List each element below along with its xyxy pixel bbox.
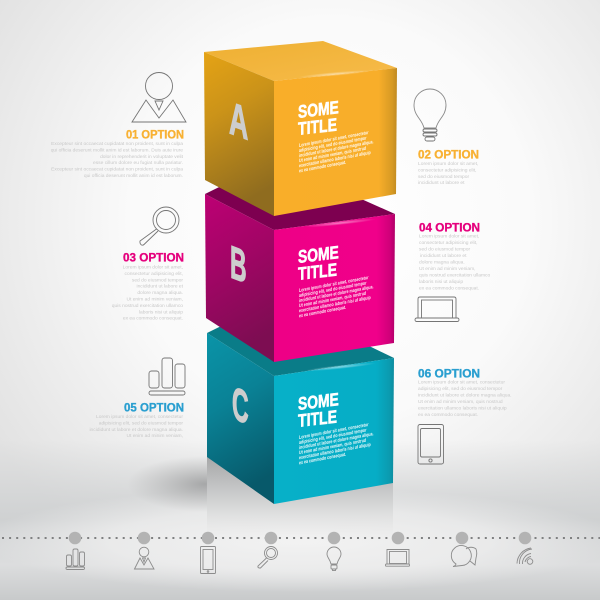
icon: magnifier — [140, 207, 179, 245]
body text B: exercitation ullamco laboris nisi ut aliquip — [299, 294, 371, 314]
body text A: ex ea commodo consequat. — [299, 159, 346, 174]
option 03: sed do eiusmod tempor — [132, 277, 183, 283]
title A — [298, 98, 339, 139]
option 01: Excepteur sint occaecat cupidatat non proident, sunt in culpa — [51, 141, 183, 147]
timeline icon: tablet — [200, 546, 216, 574]
option 06: Lorem ipsum dolor sit amet, consectetur — [418, 380, 505, 386]
icon: laptop — [415, 297, 459, 322]
title A: TITLE — [298, 115, 337, 139]
option 03: incididunt ut labore et — [136, 284, 184, 290]
body text B: ex ea commodo consequat. — [299, 304, 346, 319]
title C: SOME — [298, 390, 339, 414]
option 01: Excepteur sint occaecat cupidatat non proident, sunt in culpa — [51, 167, 183, 173]
option 03: Lorem ipsum dolor sit amet, — [123, 264, 183, 270]
body text C: incididunt ut labore et dolore magna aliqua. — [299, 431, 373, 450]
option 06: ex ea commodo consequat. — [418, 412, 478, 418]
option 03: laboris nisi ut aliquip — [139, 309, 183, 315]
option 03: Ut enim ad minim veniam, — [126, 296, 183, 302]
option 02: 02 OPTION — [418, 148, 479, 162]
letter A: A — [229, 92, 248, 151]
icon: person — [132, 72, 186, 122]
body text B: adipisicing elit, sed do eiusmod tempor — [299, 280, 367, 298]
option 01: 01 OPTION — [126, 128, 184, 142]
body text B: Lorem ipsum dolor sit amet, consectetur — [299, 274, 369, 293]
icon: light bulb — [414, 89, 446, 141]
timeline icon: bar chart — [66, 549, 84, 570]
body text A: Ut enim ad minim veniam, quis nostrud — [299, 145, 366, 163]
option 02: incididunt ut labore et — [418, 180, 465, 186]
cube B — [205, 160, 395, 362]
option 03 — [112, 250, 184, 322]
title B: TITLE — [298, 260, 337, 284]
timeline icon: magnifier — [258, 546, 278, 568]
body text A: adipisicing elit, sed do eiusmod tempor — [299, 135, 367, 153]
body text A: exercitation ullamco laboris nisi ut aliquip — [299, 149, 371, 169]
timeline icon: laptop — [386, 550, 410, 566]
option 05: Ut enim ad minim veniam, — [126, 433, 183, 439]
body text C: ex ea commodo consequat. — [299, 451, 346, 466]
title B: SOME — [298, 243, 339, 267]
option 03: 03 OPTION — [123, 250, 184, 264]
option 04: quis nostrud exercitation ullamco — [419, 272, 491, 278]
cube shadow — [127, 456, 393, 545]
option 04: Ut enim ad minim veniam, — [419, 266, 476, 272]
option 02: sed do eiusmod tempor — [418, 174, 469, 180]
letter B: B — [230, 236, 247, 293]
option 03: ex ea commodo consequat. — [123, 316, 183, 322]
body text B: Ut enim ad minim veniam, quis nostrud — [299, 290, 366, 308]
option 04: consectetur adipisicing elit, — [419, 240, 477, 246]
title A: SOME — [298, 98, 339, 122]
option 06: incididunt ut labore et dolore magna aliqua. — [418, 392, 512, 398]
option 01: esse cillum dolore eu fugiat nulla pariatur. — [93, 160, 183, 166]
option 04: dolore magna aliqua. — [419, 260, 465, 266]
option 05 — [89, 400, 184, 439]
body text B: incididunt ut labore et dolore magna aliqua. — [299, 284, 373, 303]
option 04: incididunt ut labore et — [420, 253, 467, 259]
body text A: Lorem ipsum dolor sit amet, consectetur — [299, 129, 369, 148]
option 04: sed do eiusmod tempor — [419, 246, 470, 252]
body text C: adipisicing elit, sed do eiusmod tempor — [299, 427, 367, 445]
option 03: consectetur adipisicing elit, — [125, 271, 183, 277]
option 02: Lorem ipsum dolor sit amet, — [418, 161, 478, 167]
option 03: quis nostrud exercitation ullamco — [112, 303, 183, 309]
title C — [298, 390, 339, 431]
option 06: exercitation ullamco laboris nisi ut aliquip — [418, 406, 507, 412]
body text C: exercitation ullamco laboris nisi ut aliquip — [299, 441, 371, 461]
cube A — [204, 41, 397, 216]
option 06: Ut enim ad minim veniam, quis nostrud — [418, 399, 503, 405]
cube C — [207, 300, 394, 504]
option 06 — [418, 366, 512, 418]
option 02: consectetur adipisicing elit, — [418, 167, 476, 173]
title B — [298, 243, 339, 284]
body text A: incididunt ut labore et dolore magna aliqua. — [299, 139, 373, 158]
option 04: laboris nisi ut aliquip — [419, 279, 463, 285]
option 03: dolore magna aliqua. — [137, 290, 183, 296]
option 06: 06 OPTION — [418, 366, 480, 380]
timeline icon: wifi — [517, 548, 533, 564]
option 01 — [51, 128, 184, 179]
letter C: C — [232, 377, 249, 434]
body text A — [299, 128, 373, 174]
option 05: 05 OPTION — [124, 400, 184, 414]
option 04 — [419, 220, 491, 292]
option 05: adipisicing elit, sed do eiusmod tempor — [99, 420, 183, 426]
title C: TITLE — [298, 407, 337, 431]
timeline — [2, 532, 600, 544]
timeline icon: light bulb — [327, 547, 341, 570]
icon: tablet — [418, 424, 444, 464]
option 04: ex ea commodo consequat. — [419, 286, 479, 292]
option 05: incididunt ut labore et dolore magna aliqua. — [89, 427, 183, 433]
timeline icon: person — [134, 547, 154, 569]
option 04: Lorem ipsum dolor sit amet, — [419, 234, 479, 240]
option 02 — [418, 148, 479, 186]
option 01: qui officia deserunt mollit anim id est laborum. Duis aute irure — [51, 147, 183, 153]
option 06: adipisicing elit, sed do eiusmod tempor — [418, 386, 503, 392]
option 04: 04 OPTION — [419, 220, 480, 234]
body text B — [299, 273, 373, 319]
option 01: qui officia deserunt mollit anim id est laborum. — [84, 173, 183, 179]
timeline icon: speech bubbles — [451, 546, 477, 566]
option 01: dolor in reprehenderit in voluptate velit — [100, 154, 184, 160]
option 05: Lorem ipsum dolor sit amet, consectetur — [96, 414, 183, 420]
body text C: Lorem ipsum dolor sit amet, consectetur — [299, 421, 369, 440]
body text C: Ut enim ad minim veniam, quis nostrud — [299, 437, 366, 455]
body text C — [299, 420, 373, 466]
icon: bar chart — [149, 358, 185, 395]
